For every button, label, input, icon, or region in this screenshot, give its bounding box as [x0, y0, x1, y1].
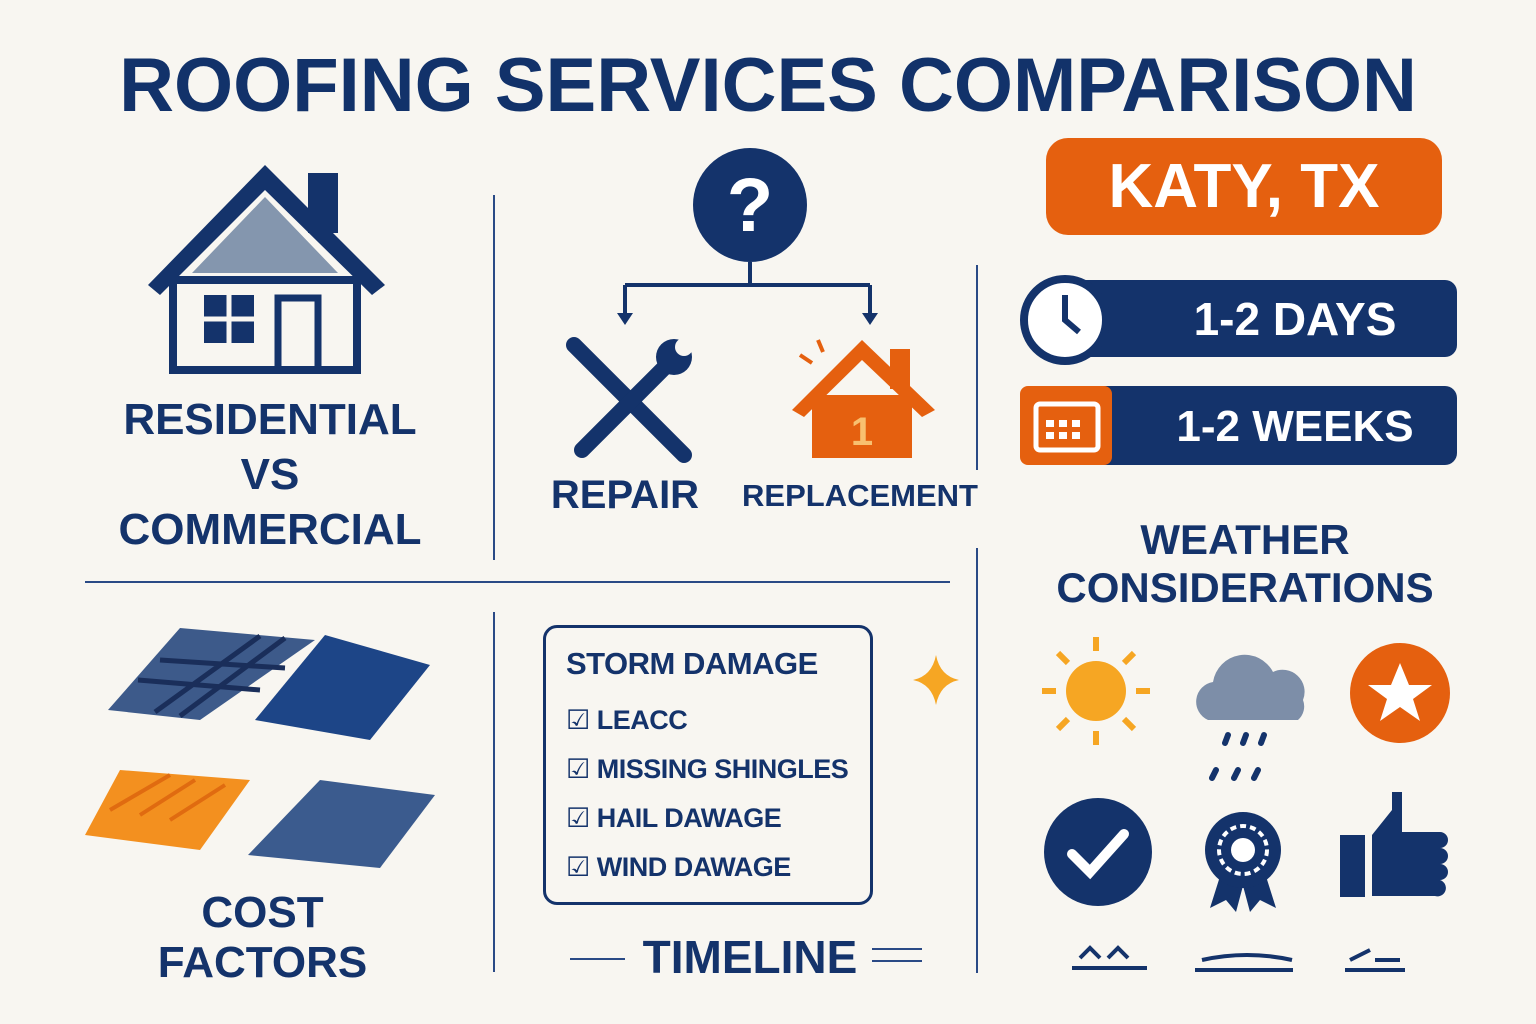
checklist: storm damage: ☑ MISSING SHINGLES — [566, 754, 848, 784]
bar: 1-2 days: 1-2 DAYS — [1194, 293, 1396, 345]
label: replacement: REPLACEMENT — [742, 478, 978, 513]
icon: residential house — [148, 165, 385, 374]
bar: 1-2 weeks — [1020, 386, 1457, 465]
text: cost factors: COST — [201, 888, 324, 937]
badge: Katy TX — [1046, 138, 1442, 235]
icon: sun — [1042, 637, 1150, 745]
badge: Katy TX: KATY, TX — [1108, 152, 1379, 221]
text: residential vs commercial: VS — [241, 450, 299, 499]
icon: rain cloud — [1196, 654, 1305, 781]
text: cost factors — [158, 888, 367, 987]
icon: replacement house — [792, 339, 935, 458]
bar: 1-2 weeks: 1-2 WEEKS — [1176, 402, 1414, 451]
icon: repair tools — [566, 337, 692, 463]
heading: weather considerations — [1056, 516, 1434, 611]
title: ROOFING SERVICES COMPARISON — [119, 43, 1417, 128]
label: repair: REPAIR — [551, 473, 699, 517]
icon: question decision — [617, 148, 878, 325]
checklist: storm damage: ☑ HAIL DAWAGE — [566, 803, 781, 833]
text: cost factors: FACTORS — [158, 938, 367, 987]
icon: check circle — [1044, 798, 1152, 906]
icon: thumbs up — [1340, 792, 1448, 897]
heading: weather considerations: WEATHER — [1140, 516, 1350, 563]
shingles — [85, 628, 435, 868]
icon: question decision: ? — [727, 163, 773, 248]
icon: star circle — [1350, 643, 1450, 743]
checklist: storm damage: ☑ WIND DAWAGE — [566, 852, 791, 882]
text: residential vs commercial — [118, 395, 422, 554]
text: residential vs commercial: COMMERCIAL — [118, 505, 422, 554]
checklist: storm damage: STORM DAMAGE — [566, 646, 818, 681]
text: residential vs commercial: RESIDENTIAL — [123, 395, 417, 444]
icon: award badge — [1205, 812, 1281, 912]
decorative marks under icons — [1072, 945, 1405, 972]
icon: sparkle — [913, 655, 959, 705]
bar: 1-2 days — [1020, 275, 1457, 365]
checklist: storm damage: ☑ LEACC — [566, 705, 687, 735]
heading: weather considerations: CONSIDERATIONS — [1056, 564, 1434, 611]
text: timeline: TIMELINE — [643, 931, 857, 983]
icon: replacement house: 1 — [851, 410, 873, 454]
checklist: storm damage — [543, 625, 873, 905]
